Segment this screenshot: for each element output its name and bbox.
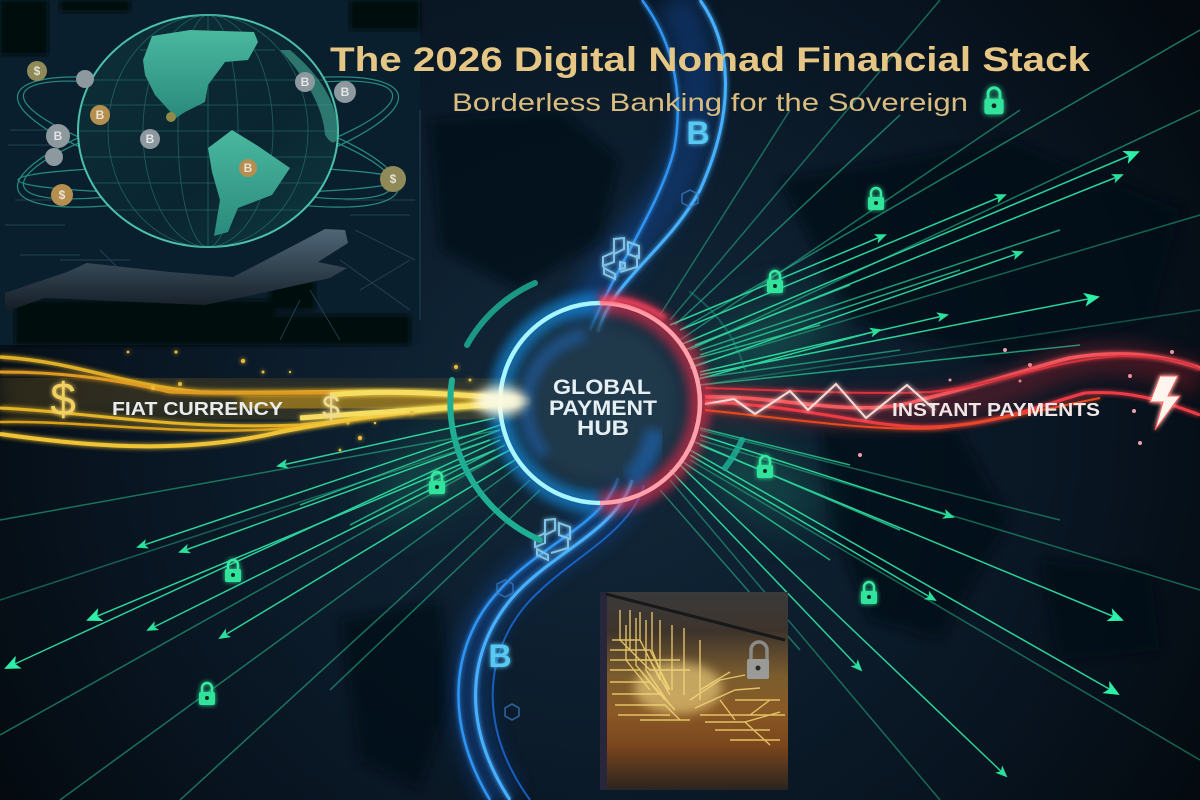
icon: blockchain cubes upper bbox=[603, 238, 639, 279]
coins: B bbox=[301, 75, 310, 89]
radiating green data lines: upper right bbox=[660, 0, 1200, 385]
icon: lock 7 bbox=[225, 560, 241, 582]
icon: dollar large: $ bbox=[50, 373, 76, 425]
south america bbox=[208, 130, 290, 236]
icon: blockchain cubes lower bbox=[535, 519, 570, 560]
title: The 2026 Digital Nomad Financial Stack bbox=[330, 41, 1090, 79]
panel: globe in hand image bbox=[0, 0, 420, 345]
coins: B bbox=[54, 129, 63, 143]
hub label bbox=[549, 376, 657, 440]
circuit grid traces bbox=[5, 110, 420, 340]
hub label: PAYMENT bbox=[549, 397, 657, 420]
globe sphere bbox=[78, 15, 338, 247]
north america bbox=[143, 30, 258, 118]
yellow fiat currency stream bbox=[0, 357, 530, 446]
coins: $ bbox=[390, 172, 397, 186]
icon: lock 2 bbox=[868, 188, 884, 210]
coins: B bbox=[341, 85, 350, 99]
globe right rim glow bbox=[280, 50, 338, 142]
icon: dollar small: $ bbox=[322, 389, 340, 425]
hub core glow bbox=[514, 317, 686, 489]
wallet dark frame bbox=[600, 592, 607, 790]
coins: $ bbox=[34, 64, 41, 78]
wallet padlock bbox=[747, 642, 769, 679]
red instant payments stream bbox=[700, 354, 1200, 429]
icon: small chain blocks bbox=[497, 190, 698, 720]
radiating green data lines: lower right bbox=[660, 428, 1200, 800]
label: fiat currency: FIAT CURRENCY bbox=[112, 399, 283, 419]
orbit rings back bbox=[7, 50, 409, 234]
hub centre flare bbox=[474, 387, 526, 415]
coins bbox=[27, 61, 406, 206]
blue crypto ribbon bbox=[458, 0, 726, 800]
coins: B bbox=[244, 161, 253, 175]
coins: $ bbox=[59, 188, 66, 202]
coins: B bbox=[146, 132, 155, 146]
coins: B bbox=[96, 108, 105, 122]
outer teal arcs bbox=[450, 283, 745, 540]
global payment hub ring bbox=[500, 300, 700, 503]
panel: crypto wallet bbox=[600, 592, 788, 790]
hand bbox=[5, 229, 348, 312]
icon: lightning bolt bbox=[1150, 376, 1180, 430]
icon: lock 8 bbox=[199, 683, 215, 705]
subtitle: Borderless Banking for the Sovereign bbox=[452, 89, 968, 117]
icon: bitcoin lower: B bbox=[488, 638, 512, 674]
pink sparks bbox=[858, 348, 1174, 457]
hub label: HUB bbox=[577, 417, 629, 440]
icon: lock 4 bbox=[757, 456, 773, 478]
icon: bitcoin upper: B bbox=[686, 115, 710, 151]
wallet flap edge bbox=[606, 594, 785, 640]
gold sparks bbox=[127, 350, 471, 451]
icon: lock beside subtitle bbox=[984, 88, 1004, 114]
globe grid bbox=[78, 15, 338, 247]
circuit traces bbox=[610, 610, 785, 745]
icon: lock 6 bbox=[429, 472, 445, 494]
panel backdrop bbox=[0, 0, 420, 345]
icon: lock 5 bbox=[861, 582, 877, 604]
radiating green data lines: lower left bbox=[0, 418, 540, 800]
label: instant payments: INSTANT PAYMENTS bbox=[892, 400, 1100, 420]
wallet body bbox=[600, 592, 788, 790]
green glow behind fans bbox=[356, 288, 845, 536]
icon: lock 3 bbox=[767, 271, 783, 293]
background world map bbox=[340, 110, 1180, 790]
hub label: GLOBAL bbox=[553, 376, 651, 399]
